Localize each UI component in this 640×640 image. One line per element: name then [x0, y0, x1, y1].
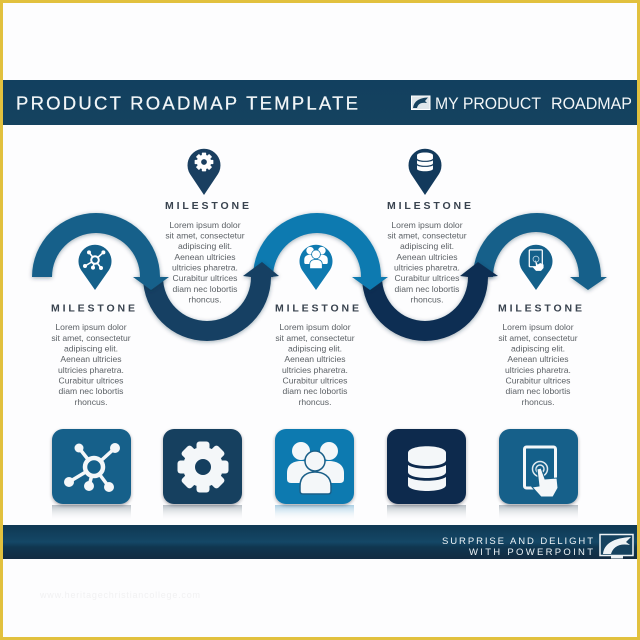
milestone 2 text: [165, 200, 249, 304]
milestone 3 text: sit amet, consectetur: [275, 333, 355, 343]
milestone 4 text: adipiscing elit.: [400, 241, 454, 251]
icon: gear: [178, 442, 228, 492]
pin 2: [187, 149, 220, 195]
milestone 5 text: Lorem ipsum dolor: [502, 322, 574, 332]
milestone 1 text: Curabitur ultrices: [59, 376, 123, 386]
tile: tablet: [499, 429, 578, 521]
milestone 3 text: adipiscing elit.: [288, 344, 342, 354]
header brand text: ROADMAP: [551, 94, 632, 113]
milestone 4 text: MILESTONE: [387, 200, 471, 212]
milestone 5 text: sit amet, consectetur: [498, 333, 578, 343]
arrow arc 2: [143, 262, 279, 341]
milestone 3 text: ultricies pharetra.: [282, 365, 348, 375]
icon: gear small: [195, 153, 213, 171]
arrow arc 1: [32, 213, 169, 290]
tile: gear: [163, 429, 242, 521]
pin 5: [520, 245, 552, 290]
milestone 3 text: diam nec lobortis: [283, 386, 347, 396]
footer text: [442, 536, 593, 558]
milestone 5 text: Curabitur ultrices: [506, 376, 570, 386]
icon: footer logo: [600, 534, 633, 558]
icon: database small: [417, 152, 433, 171]
milestone 3 text: MILESTONE: [275, 302, 359, 314]
milestone 5 text: diam nec lobortis: [506, 386, 570, 396]
milestone 1 text: diam nec lobortis: [59, 386, 123, 396]
milestone 2 text: diam nec lobortis: [173, 284, 237, 294]
milestone 2 text: ultricies pharetra.: [172, 262, 238, 272]
milestone 2 text: adipiscing elit.: [178, 241, 232, 251]
milestone 1 text: Lorem ipsum dolor: [55, 322, 127, 332]
tile: database: [387, 429, 466, 521]
milestone 1 text: Aenean ultricies: [60, 354, 122, 364]
milestone 4 text: Aenean ultricies: [396, 252, 458, 262]
milestone 4 text: sit amet, consectetur: [387, 230, 467, 240]
milestone 1 text: MILESTONE: [51, 302, 135, 314]
pin 1: [78, 245, 111, 290]
milestone 1 text: ultricies pharetra.: [58, 365, 124, 375]
watermark: www.heritagechristiancollege.com: [39, 590, 200, 600]
milestone 1 text: adipiscing elit.: [64, 344, 118, 354]
milestone 2 text: MILESTONE: [165, 200, 249, 212]
milestone 4 text: Curabitur ultrices: [395, 273, 459, 283]
header brand text: MY PRODUCT: [435, 94, 541, 113]
icon: header logo: [412, 96, 430, 110]
icon: network: [64, 443, 120, 492]
milestone 3 text: Curabitur ultrices: [283, 376, 347, 386]
milestone 1 text: rhoncus.: [75, 397, 107, 407]
icon: people: [287, 442, 344, 494]
title: PRODUCT ROADMAP TEMPLATE: [16, 92, 358, 114]
milestone 5 text: adipiscing elit.: [511, 344, 565, 354]
milestone 5 text: Aenean ultricies: [507, 354, 569, 364]
milestone 4 text: diam nec lobortis: [395, 284, 459, 294]
roadmap wave arrows: [32, 213, 607, 341]
milestone 3 text: [275, 302, 359, 407]
milestone 5 text: [498, 302, 582, 407]
milestone 5 text: MILESTONE: [498, 302, 582, 314]
milestone 3 text: Lorem ipsum dolor: [279, 322, 351, 332]
milestone 2 text: Aenean ultricies: [174, 252, 236, 262]
footer text: WITH POWERPOINT: [469, 547, 593, 558]
arrow arc 5: [473, 213, 607, 290]
header brand text: [435, 94, 632, 113]
icon: tablet touch: [524, 447, 558, 497]
milestone 1 text: [51, 302, 135, 407]
header band: [3, 80, 637, 125]
arrow arc 4: [362, 262, 498, 341]
icon: network small: [83, 250, 105, 270]
arrow arc 3: [253, 213, 388, 290]
milestone 2 text: Lorem ipsum dolor: [169, 220, 241, 230]
pin 3: [300, 245, 332, 290]
pin 4: [408, 149, 442, 195]
milestone 4 text: Lorem ipsum dolor: [391, 220, 463, 230]
footer text: SURPRISE AND DELIGHT: [442, 536, 593, 547]
milestone 3 text: rhoncus.: [299, 397, 331, 407]
milestone 4 text: ultricies pharetra.: [394, 262, 460, 272]
tile: network: [52, 429, 131, 521]
milestone 5 text: ultricies pharetra.: [505, 365, 571, 375]
milestone 2 text: rhoncus.: [189, 294, 221, 304]
milestone 4 text: rhoncus.: [411, 294, 443, 304]
milestone 2 text: Curabitur ultrices: [173, 273, 237, 283]
icon: people small: [304, 247, 328, 269]
footer band: [3, 525, 637, 559]
icon: tablet small: [529, 250, 544, 271]
tile: people: [275, 429, 354, 521]
milestone 2 text: sit amet, consectetur: [165, 230, 245, 240]
milestone 1 text: sit amet, consectetur: [51, 333, 131, 343]
icon: database: [408, 446, 446, 491]
milestone 5 text: rhoncus.: [522, 397, 554, 407]
milestone 3 text: Aenean ultricies: [284, 354, 346, 364]
milestone 4 text: [387, 200, 471, 304]
